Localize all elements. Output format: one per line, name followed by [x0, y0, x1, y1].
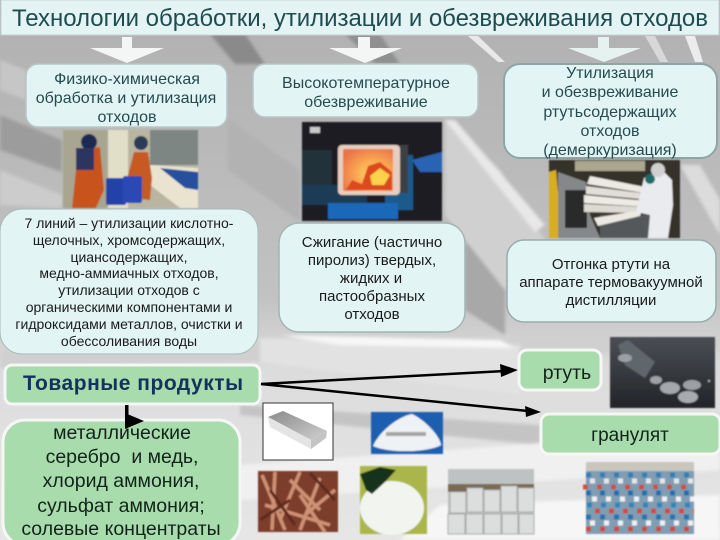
panel: seven lines description: щелочных, хромсодержащих,	[33, 232, 225, 248]
arrow: products to metals	[125, 405, 144, 429]
photo: white powder	[371, 412, 443, 454]
panel: incineration description: Сжигание (частично	[302, 234, 442, 251]
panel: mercury: ртуть	[543, 362, 591, 384]
panel: mercury waste demercurization: (демеркуризация)	[543, 142, 677, 159]
panel: incineration description	[279, 223, 465, 332]
panel: seven lines description: медно-аммиачных отходов,	[39, 265, 219, 281]
panel: metals and salts: солевые концентраты	[21, 518, 221, 540]
panel: metals and salts: сульфат аммония;	[37, 495, 205, 517]
photo: silver ingot	[263, 403, 333, 460]
panel: physical-chemical treatment: Физико-химическая	[54, 71, 200, 88]
panel: vacuum distillation description: дистилляции	[566, 292, 656, 309]
arrow: products to mercury	[261, 364, 518, 384]
panel: high-temperature neutralisation	[253, 64, 478, 117]
panel: physical-chemical treatment: обработка и утилизация	[36, 90, 216, 107]
photo: incinerator furnace	[302, 122, 442, 221]
panel: seven lines description: обессоливания воды	[61, 333, 197, 349]
panel: incineration description: пастообразных	[319, 288, 425, 305]
heading: commercial products	[5, 365, 260, 404]
panel: seven lines description: утилизации отходов с	[58, 282, 200, 298]
heading: commercial products: Товарные продукты	[23, 372, 243, 395]
panel: physical-chemical treatment	[26, 64, 227, 127]
arrow: to physical-chemical column	[90, 37, 164, 63]
photo: copper wire	[258, 471, 338, 532]
panel: metals and salts: металлические	[53, 422, 191, 444]
photo: workers with blue barrels	[63, 130, 198, 208]
panel: seven lines description	[0, 209, 258, 354]
panel: mercury waste demercurization: Утилизация	[566, 65, 654, 82]
panel: physical-chemical treatment: отходов	[98, 109, 156, 126]
photo: ammonium salt	[360, 466, 427, 535]
arrow: to mercury column	[568, 37, 641, 62]
panel: incineration description: пиролиз) твердых,	[308, 252, 436, 269]
panel: mercury waste demercurization: отходов	[581, 123, 639, 140]
photo: plastic granules	[583, 462, 694, 534]
panel: incineration description: жидких и	[340, 270, 402, 287]
panel: vacuum distillation description	[507, 240, 716, 322]
panel: seven lines description: 7 линий – утилизации кислотно-	[25, 215, 234, 231]
panel: high-temperature neutralisation: обезвреживание	[304, 94, 428, 111]
photo: worker loading fluorescent tubes	[549, 160, 680, 238]
panel: seven lines description: гидроксидами металлов, очистки и	[15, 316, 243, 332]
panel: seven lines description: циансодержащих,	[70, 249, 188, 265]
panel: high-temperature neutralisation: Высокотемпературное	[282, 75, 450, 92]
panel: metals and salts: хлорид аммония,	[43, 470, 199, 492]
panel: seven lines description: органическими компонентами и	[26, 299, 232, 315]
panel: vacuum distillation description: Отгонка ртути на	[552, 256, 671, 273]
arrow: to high-temperature column	[329, 37, 402, 63]
arrow: products to granulate	[261, 384, 541, 417]
title: Технологии обработки, утилизации и обезвреживания отходов	[12, 5, 708, 32]
panel: vacuum distillation description: аппарате термовакуумной	[519, 274, 703, 291]
panel: granulate	[541, 414, 720, 454]
panel: granulate: гранулят	[591, 425, 669, 446]
panel: mercury waste demercurization: ртутьсодержащих	[543, 104, 677, 121]
photo: big bags of salt concentrate	[448, 469, 534, 534]
panel: metals and salts: серебро и медь,	[46, 446, 198, 468]
panel: mercury waste demercurization	[504, 64, 717, 159]
panel: incineration description: отходов	[344, 306, 400, 323]
panel: mercury waste demercurization: и обезвреживание	[542, 84, 678, 101]
panel: mercury	[519, 350, 601, 390]
photo: mercury droplets	[610, 337, 715, 408]
panel: metals and salts	[3, 420, 240, 540]
